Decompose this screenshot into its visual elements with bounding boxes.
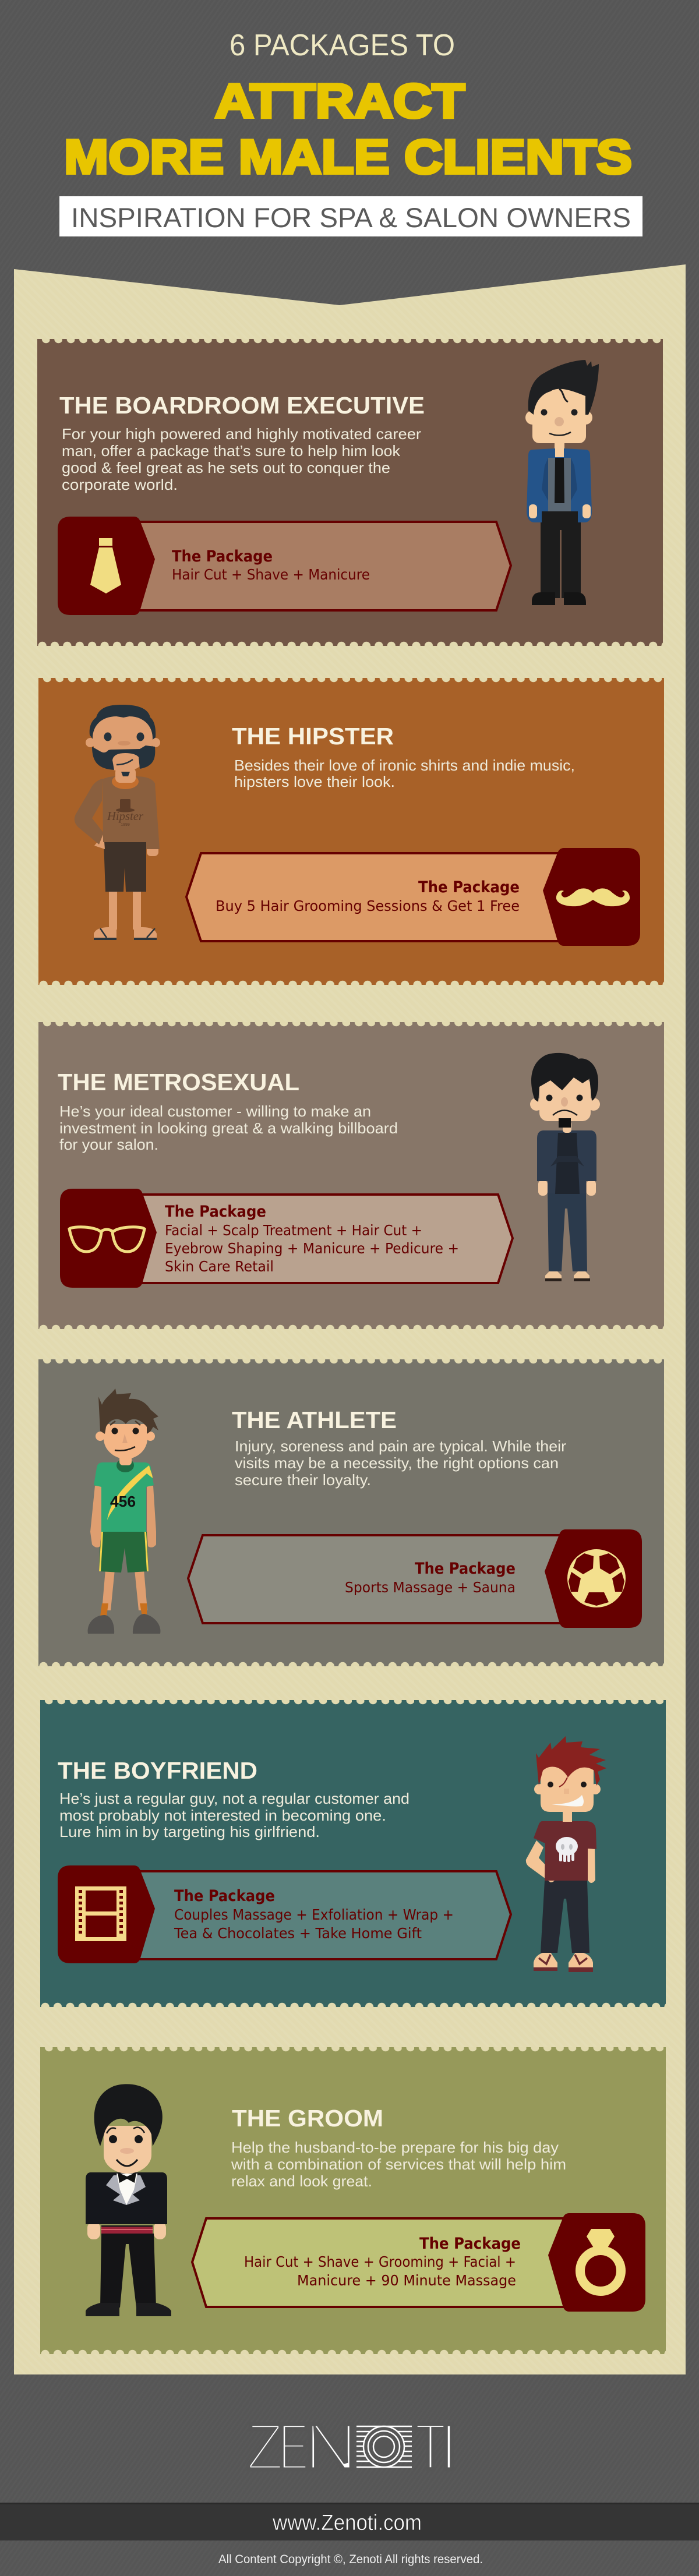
description — [59, 1790, 409, 1840]
description: with a combination of services that will help him — [231, 2155, 566, 2173]
figure: groom — [86, 2084, 171, 2316]
title line: 6 packages to: 6 PACKAGES TO — [230, 29, 455, 62]
description: He’s just a regular guy, not a regular customer and — [59, 1790, 409, 1807]
title block — [59, 29, 642, 236]
icon: football — [567, 1549, 626, 1607]
package text: Buy 5 Hair Grooming Sessions & Get 1 Free — [216, 897, 520, 914]
icon: tie — [90, 538, 121, 593]
description: Help the husband-to-be prepare for his big day — [231, 2139, 559, 2156]
shirt print — [107, 799, 144, 827]
logo: zenoti — [246, 2410, 458, 2483]
package text — [345, 1560, 516, 1596]
package text: The Package — [415, 1560, 516, 1578]
cream backing panel — [14, 264, 686, 2374]
description: good & feel great as he sets out to conquer the — [62, 459, 390, 476]
shirt print: 1999 — [121, 823, 130, 827]
description: relax and look great. — [231, 2172, 372, 2190]
package banner — [192, 2213, 645, 2312]
website: www.Zenoti.com — [272, 2511, 422, 2535]
logo mark: striped O — [356, 2426, 412, 2467]
package text: The Package — [418, 878, 520, 896]
panel: the groom — [40, 2047, 666, 2354]
package text: Manicure + 90 Minute Massage — [297, 2272, 516, 2289]
figure: hipster — [75, 705, 160, 940]
figure: executive — [525, 360, 599, 605]
panel: the boyfriend — [40, 1700, 666, 2007]
package banner — [188, 1529, 642, 1628]
package text: Facial + Scalp Treatment + Hair Cut + — [165, 1222, 422, 1239]
package text: The Package — [174, 1887, 275, 1905]
description: Lure him in by targeting his girlfriend. — [59, 1823, 320, 1840]
description — [59, 1103, 398, 1153]
description: most probably not interested in becoming one. — [59, 1807, 386, 1824]
heading: THE BOYFRIEND — [58, 1757, 257, 1784]
package text: Hair Cut + Shave + Grooming + Facial + — [244, 2253, 516, 2270]
package text — [174, 1887, 454, 1942]
figure: athlete — [88, 1388, 160, 1634]
panel: the athlete — [38, 1359, 664, 1666]
shirt print: Hipster — [107, 809, 144, 823]
copyright: All Content Copyright ©, Zenoti All rights reserved. — [218, 2553, 483, 2566]
icon: glasses — [69, 1227, 144, 1252]
heading: THE GROOM — [232, 2105, 383, 2132]
description: For your high powered and highly motivated career — [62, 425, 421, 443]
package text: Couples Massage + Exfoliation + Wrap + — [174, 1906, 454, 1923]
icon: film strip — [75, 1886, 126, 1941]
panel: the hipster — [38, 678, 664, 985]
description: for your salon. — [59, 1136, 158, 1153]
skull print — [556, 1837, 578, 1862]
package text: Sports Massage + Sauna — [345, 1579, 516, 1596]
package banner — [60, 1189, 513, 1288]
package text — [165, 1203, 459, 1275]
package text: The Package — [419, 2235, 521, 2253]
title line: attract: ATTRACT — [215, 73, 465, 128]
heading: THE HIPSTER — [232, 723, 394, 750]
figure: boyfriend — [526, 1736, 606, 1972]
icon: ring — [580, 2229, 621, 2291]
figure: metrosexual — [530, 1053, 600, 1281]
heading: THE BOARDROOM EXECUTIVE — [59, 392, 425, 419]
description — [62, 425, 421, 493]
panel: the metrosexual — [38, 1022, 664, 1329]
package text — [216, 878, 520, 914]
subtitle box: INSPIRATION FOR SPA & SALON OWNERS — [71, 202, 631, 233]
logo: zenoti: Z — [246, 2410, 284, 2483]
package banner — [58, 1865, 511, 1963]
package banner — [58, 517, 511, 615]
description: hipsters love their look. — [234, 773, 395, 790]
description: investment in looking great & a walking billboard — [59, 1119, 398, 1137]
description — [235, 1437, 566, 1489]
description: man, offer a package that’s sure to help him look — [62, 442, 401, 460]
description: He’s your ideal customer - willing to make an — [59, 1103, 371, 1120]
description: visits may be a necessity, the right options can — [235, 1454, 559, 1472]
description: Besides their love of ironic shirts and indie music, — [234, 757, 575, 774]
heading: THE METROSEXUAL — [58, 1069, 299, 1096]
package text — [172, 547, 370, 583]
logo: zenoti: N — [304, 2410, 358, 2483]
logo: zenoti: I — [440, 2410, 458, 2483]
package text: The Package — [165, 1203, 266, 1221]
package text: Eyebrow Shaping + Manicure + Pedicure + — [165, 1240, 459, 1257]
panel: the boardroom executive — [37, 339, 663, 646]
package text — [244, 2235, 521, 2289]
figure: athlete: 456 — [110, 1493, 136, 1510]
icon: moustache — [556, 888, 630, 906]
package text: Hair Cut + Shave + Manicure — [172, 566, 370, 583]
description — [231, 2139, 566, 2190]
logo: zenoti: T — [415, 2410, 446, 2483]
title line: more male clients: MORE MALE CLIENTS — [64, 129, 632, 184]
description: secure their loyalty. — [235, 1471, 371, 1489]
package text: The Package — [172, 547, 273, 566]
package text: Tea & Chocolates + Take Home Gift — [174, 1925, 422, 1942]
heading: THE ATHLETE — [232, 1407, 397, 1433]
description: corporate world. — [62, 476, 178, 493]
description: Injury, soreness and pain are typical. While their — [235, 1437, 566, 1455]
package banner — [186, 848, 640, 946]
logo: zenoti: E — [278, 2410, 309, 2483]
footer bar — [0, 2503, 699, 2540]
description — [234, 757, 575, 790]
package text: Skin Care Retail — [165, 1258, 274, 1275]
